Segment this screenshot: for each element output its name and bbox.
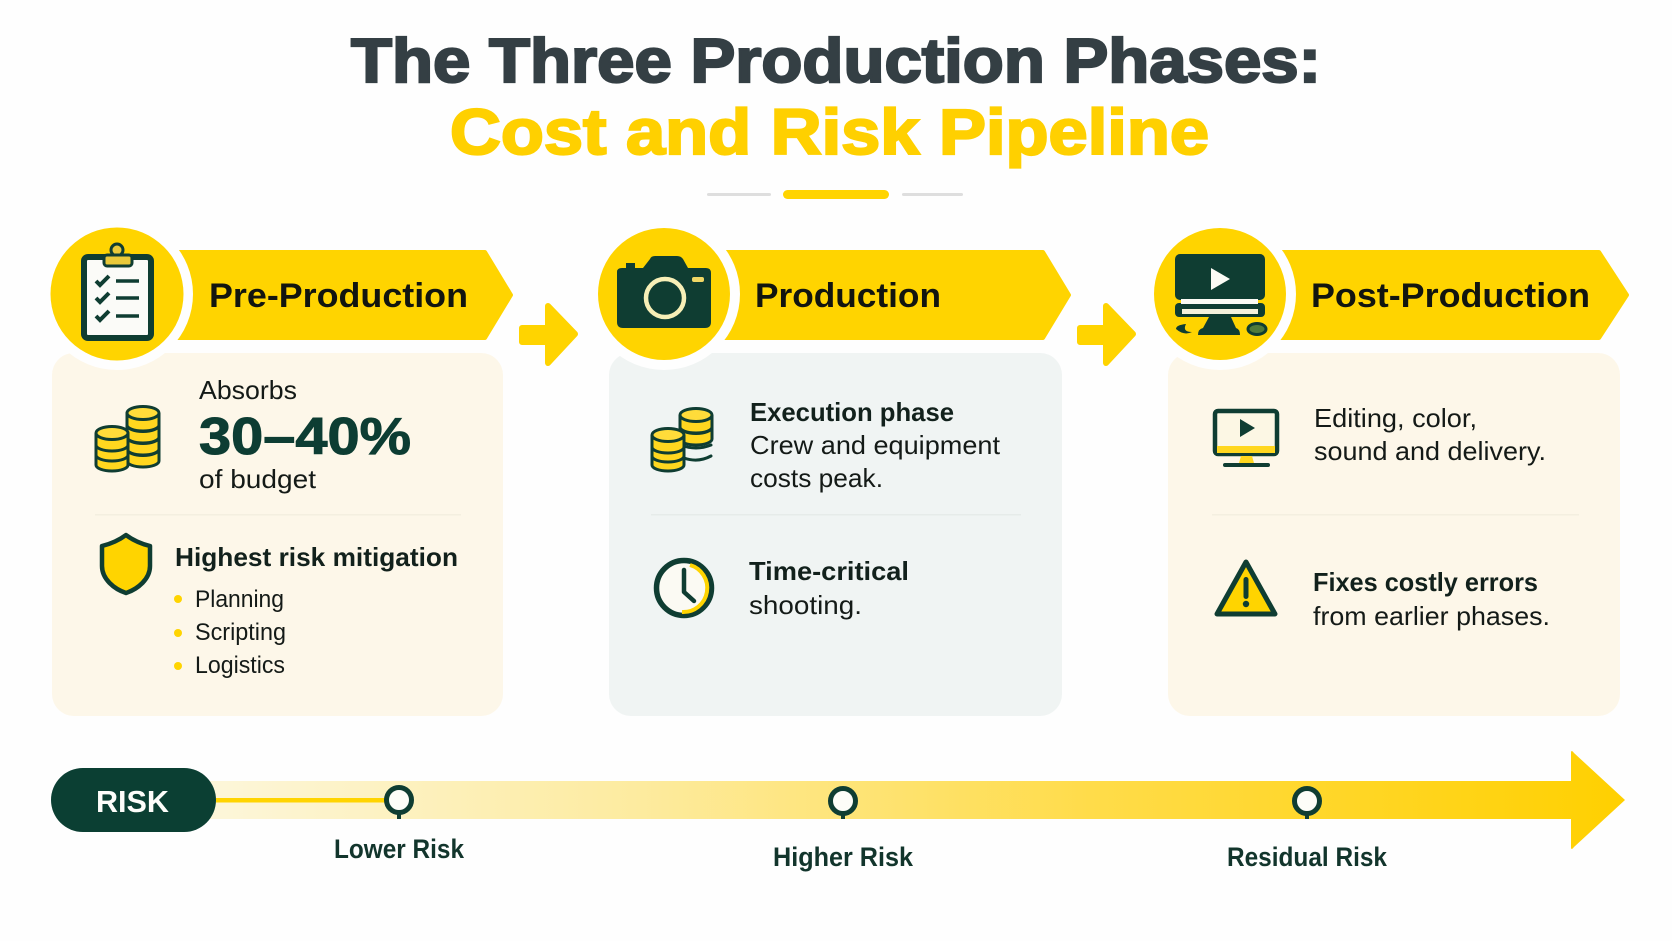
execution text: Crew and equipment xyxy=(750,430,1001,460)
fixes text: from earlier phases. xyxy=(1313,601,1550,631)
risk mitigation list: Scripting xyxy=(195,619,286,646)
marker: residual risk: Residual Risk xyxy=(1227,842,1388,872)
icon: coin stacks xyxy=(652,408,712,471)
icon: camera xyxy=(617,256,711,328)
heading: Pre-Production xyxy=(209,277,468,315)
risk label xyxy=(51,768,216,832)
icon: shield xyxy=(102,535,150,593)
title: The Three Production Phases: xyxy=(351,27,1321,96)
title: Cost and Risk Pipeline xyxy=(450,96,1209,168)
marker: lower risk: Lower Risk xyxy=(334,834,465,864)
icon: coin stacks xyxy=(96,406,159,471)
editing text: Editing, color, xyxy=(1314,403,1477,433)
risk label: RISK xyxy=(96,784,170,819)
panel: production card xyxy=(609,353,1062,716)
icon: warning triangle xyxy=(1217,562,1275,614)
icon: editing monitor xyxy=(1175,254,1266,335)
panel: post-production card xyxy=(1168,353,1620,716)
execution text: Execution phase xyxy=(750,397,954,427)
marker: higher risk xyxy=(773,788,914,872)
heading: Post-Production xyxy=(1311,277,1590,315)
arrow: production to post-production xyxy=(1080,306,1133,363)
banner: post-production xyxy=(1144,218,1627,370)
panel: pre-production card xyxy=(52,353,503,716)
budget share text: of budget xyxy=(199,464,317,494)
banner: production xyxy=(588,218,1069,370)
budget share text: 30–40% xyxy=(199,408,411,466)
risk mitigation list xyxy=(174,586,286,679)
icon: clock xyxy=(656,560,712,616)
editing text: sound and delivery. xyxy=(1314,436,1546,466)
time-critical text: Time-critical xyxy=(749,556,909,586)
fixes text xyxy=(1313,567,1550,631)
icon: monitor xyxy=(1215,411,1277,467)
title xyxy=(351,27,1321,168)
title divider xyxy=(707,190,963,199)
risk mitigation list: Logistics xyxy=(195,652,285,679)
marker: higher risk: Higher Risk xyxy=(773,842,914,872)
risk pipeline arrow xyxy=(51,751,1625,872)
budget share text: Absorbs xyxy=(199,375,297,405)
risk mitigation list: Planning xyxy=(195,586,284,613)
banner: pre-production xyxy=(41,218,511,370)
time-critical text: shooting. xyxy=(749,590,862,620)
risk mitigation heading: Highest risk mitigation xyxy=(175,542,458,572)
budget share text xyxy=(199,375,411,494)
heading: Production xyxy=(755,277,941,315)
editing text xyxy=(1314,403,1546,466)
execution text xyxy=(750,397,1001,493)
marker: residual risk xyxy=(1227,788,1388,872)
icon: clipboard xyxy=(84,244,151,338)
arrow: pre-production to production xyxy=(522,306,575,363)
marker: lower risk xyxy=(334,788,465,864)
time-critical text xyxy=(749,556,909,620)
execution text: costs peak. xyxy=(750,463,883,493)
fixes text: Fixes costly errors xyxy=(1313,567,1538,597)
